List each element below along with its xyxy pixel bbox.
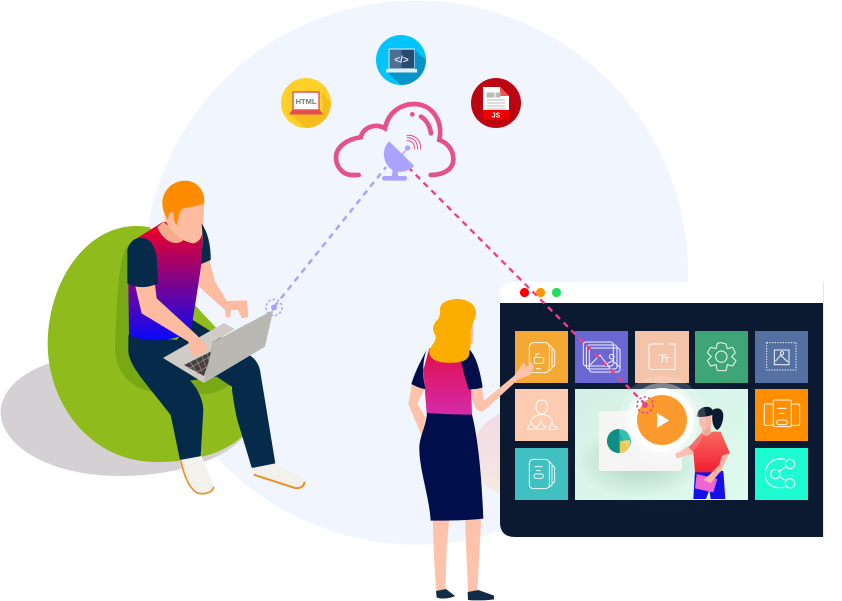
- neck: [157, 222, 184, 243]
- person on beanbag with laptop: [48, 181, 304, 494]
- shirt: [128, 222, 203, 340]
- presenter front arm: [703, 453, 729, 483]
- slide card: [599, 411, 682, 471]
- left sleeve: [127, 238, 158, 287]
- hair: [429, 299, 476, 363]
- tile row 3: [515, 448, 808, 500]
- icon: page layouts: [764, 400, 800, 427]
- pie chart icon: [607, 429, 631, 453]
- right sleeve: [201, 223, 211, 264]
- sleeves: [411, 350, 427, 389]
- presenter hair: [697, 407, 723, 430]
- left arm: [135, 285, 207, 356]
- front arm: [469, 361, 534, 411]
- right shoe: [254, 463, 304, 487]
- cloud outline: [336, 104, 453, 175]
- play signal marker: [637, 397, 653, 413]
- browser window: [500, 282, 824, 537]
- pale ellipse behind woman: [472, 409, 572, 499]
- hair: [162, 181, 204, 225]
- presenter face: [698, 410, 712, 429]
- presenter back arm: [675, 445, 695, 458]
- back arm: [408, 383, 426, 436]
- icon: framed image: [767, 343, 796, 370]
- icon: share: [765, 459, 795, 488]
- neck skin: [465, 323, 473, 345]
- trousers: [128, 320, 275, 468]
- icon: document stack: [529, 343, 555, 373]
- shoes: [436, 589, 455, 598]
- beanbag: [48, 226, 245, 462]
- laptop screen: [204, 310, 273, 383]
- top: [423, 348, 472, 415]
- pink dashed connection: [408, 167, 646, 405]
- title bar: [500, 282, 823, 303]
- background circle: [144, 0, 688, 544]
- tile row 2: [515, 389, 808, 441]
- satellite dish: [382, 135, 421, 181]
- woman viewing the screen: [408, 299, 534, 600]
- right arm: [198, 259, 248, 318]
- presenter folder: [695, 474, 717, 492]
- icon: gear: [707, 343, 736, 371]
- laptop signal marker: [266, 300, 282, 316]
- icon: JS file: JS: [492, 112, 501, 120]
- icon: document pages: [529, 459, 555, 489]
- laptop base: [163, 323, 235, 383]
- laptop keyboard: [184, 351, 212, 376]
- video panel: [575, 389, 748, 500]
- window body: [500, 303, 823, 537]
- icon: learner with stars: [527, 400, 557, 429]
- icon: code laptop: </>: [394, 55, 409, 66]
- icon: JS file: [471, 78, 521, 128]
- dress: [419, 413, 483, 521]
- tile row 1: [515, 331, 808, 383]
- play button: [618, 376, 706, 464]
- presenter t-shirt: [689, 432, 730, 472]
- signal waves: [407, 135, 421, 149]
- tile icons: [527, 342, 800, 489]
- legs: [433, 517, 481, 592]
- icon: text box: [649, 344, 675, 369]
- icon: image gallery: [583, 342, 620, 372]
- icon: HTML laptop: [281, 78, 331, 128]
- shadow under beanbag: [1, 363, 245, 476]
- presenter trousers: [693, 471, 725, 499]
- face: [163, 200, 204, 243]
- presenter neck: [702, 425, 711, 437]
- left shoe: [180, 456, 213, 493]
- icon: code laptop: [376, 35, 426, 85]
- beanbag inner shade: [115, 244, 231, 394]
- cloud with satellite dish: [336, 104, 453, 181]
- presenter: [675, 407, 730, 499]
- window buttons: [520, 288, 561, 297]
- purple dashed connection: [274, 167, 386, 307]
- icon: HTML laptop: HTML: [296, 97, 317, 106]
